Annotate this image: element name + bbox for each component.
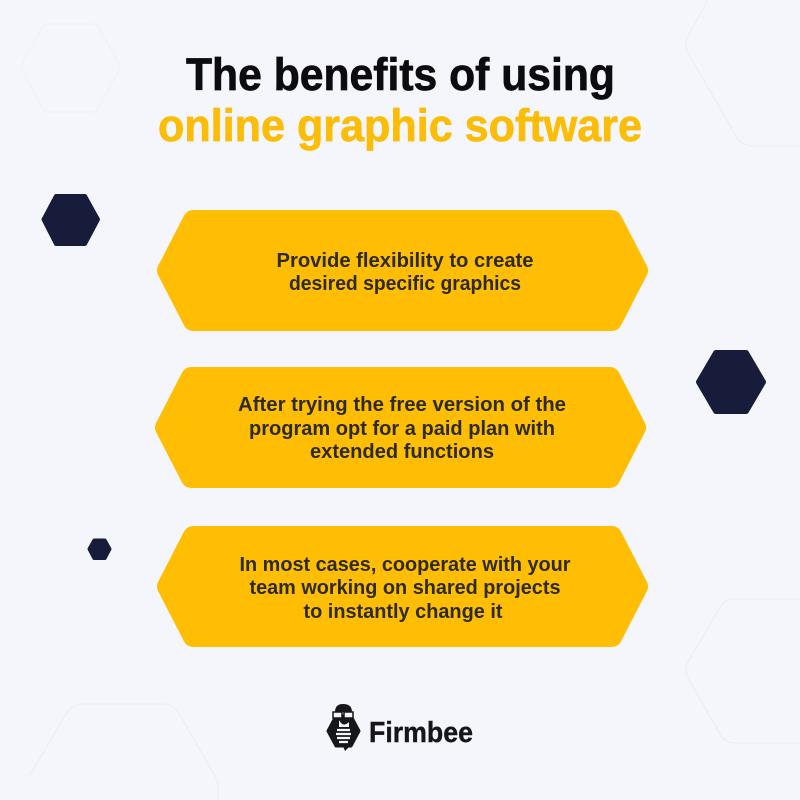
panel: benefit 2: extended functions [310, 441, 494, 463]
logo: Firmbee [328, 704, 473, 751]
panel: benefit 1: Provide flexibility to create [276, 250, 534, 272]
panel: benefit 1: desired specific graphics [289, 273, 521, 295]
decorative dark hexagon: left small [89, 540, 110, 558]
background hexagon outline: top left [22, 24, 119, 112]
icon: bee mascot [328, 704, 359, 751]
panel: benefit 1 [167, 220, 638, 321]
title [158, 49, 642, 151]
panel: benefit 3: to instantly change it [304, 601, 503, 623]
decorative dark hexagon: left top [44, 196, 98, 244]
background hexagon outline: bottom left [30, 704, 218, 800]
panel: benefit 2: After trying the free version of the [238, 394, 566, 416]
logo wordmark: Firmbee [369, 717, 473, 749]
background hexagon outline: top right [686, 0, 800, 146]
panel: benefit 2: program opt for a paid plan with [249, 418, 555, 440]
panel: benefit 3: team working on shared projects [250, 577, 560, 599]
panel: benefit 3: In most cases, cooperate with your [240, 554, 571, 576]
panel: benefit 3 [167, 536, 638, 637]
background hexagon outline: bottom right [686, 599, 800, 743]
decorative dark hexagon: right [699, 353, 763, 411]
title: online graphic software [158, 100, 642, 151]
panel: benefit 2 [165, 377, 636, 478]
title: The benefits of using [186, 49, 615, 100]
